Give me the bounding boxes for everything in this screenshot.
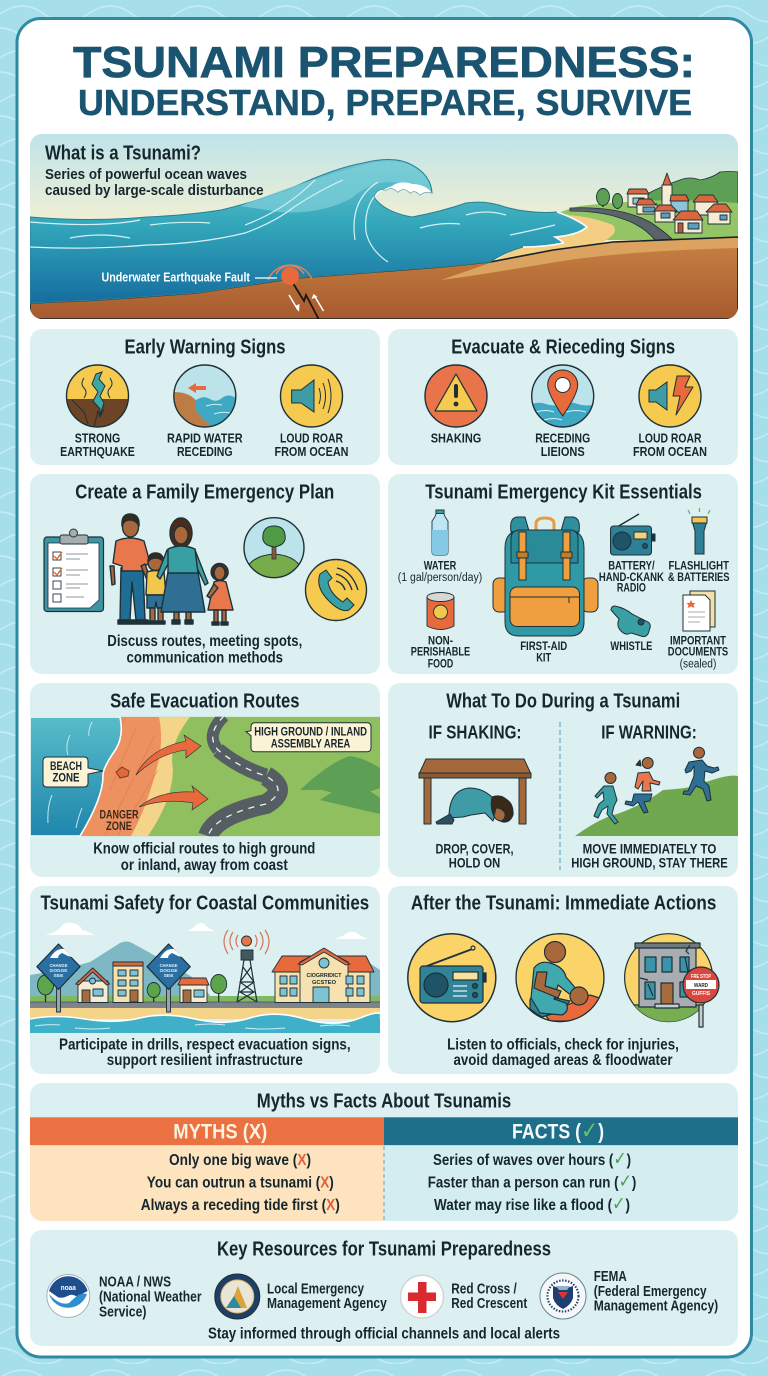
kit labels bbox=[398, 560, 730, 670]
mother bbox=[174, 612, 191, 621]
text: FEMA: FEMA bbox=[594, 1269, 627, 1285]
coastal scene: GOGGE bbox=[50, 968, 68, 973]
coastal scene bbox=[30, 923, 381, 1033]
panel: early warning signs: Early Warning Signs bbox=[124, 336, 286, 358]
panel: after the tsunami bbox=[388, 886, 738, 1074]
labels: LOUD ROAR bbox=[638, 432, 702, 446]
panel: coastal communities bbox=[30, 886, 381, 1074]
icon: receding location pin bbox=[530, 365, 596, 430]
family illustration bbox=[110, 514, 233, 625]
icon: important documents bbox=[683, 591, 715, 631]
logo: FEMA bbox=[540, 1273, 586, 1319]
panel: evacuate and receding signs bbox=[388, 329, 738, 465]
text: NOAA: NOAA / NWS bbox=[99, 1275, 171, 1291]
hero text: Series of powerful ocean waves bbox=[45, 166, 247, 183]
tower bbox=[237, 960, 257, 1002]
earth bbox=[30, 237, 738, 319]
boy bbox=[146, 570, 166, 595]
text: red cross: Red Crescent bbox=[451, 1296, 527, 1312]
labels: FROM OCEAN bbox=[633, 445, 707, 459]
text: FEMA: Management Agency) bbox=[594, 1299, 718, 1315]
text: red cross: Red Cross / bbox=[451, 1281, 517, 1297]
caption bbox=[447, 1036, 679, 1069]
kit labels: RADIO bbox=[617, 583, 646, 595]
kit labels: BATTERY/ bbox=[608, 560, 655, 572]
coastal scene: CHANGE bbox=[160, 963, 178, 968]
coastal scene: CIOGRRIDICT bbox=[306, 973, 342, 979]
house bbox=[78, 981, 108, 1002]
fault bbox=[292, 284, 320, 319]
icon: damaged building and stop sign bbox=[624, 934, 719, 1027]
logo: red cross bbox=[400, 1275, 444, 1318]
girl bbox=[208, 580, 233, 610]
labels bbox=[436, 840, 728, 871]
panel: coastal communities: Tsunami Safety for Coastal Communities bbox=[40, 892, 369, 914]
kit labels: FIRST-AID bbox=[520, 641, 567, 653]
stop sign text: GUFFIS bbox=[692, 991, 710, 997]
caption: communication methods bbox=[127, 649, 283, 666]
labels: EARTHQUAKE bbox=[60, 445, 135, 459]
text: NOAA bbox=[99, 1275, 202, 1321]
road bbox=[213, 716, 224, 750]
caption: support resilient infrastructure bbox=[107, 1052, 303, 1069]
caption: or inland, away from coast bbox=[121, 857, 288, 874]
logo: NOAA bbox=[47, 1274, 90, 1318]
sea bbox=[30, 159, 587, 303]
coastal scene: CHANGE bbox=[50, 963, 68, 968]
facts column: Faster than a person can run (✓) bbox=[428, 1171, 636, 1192]
panel: evacuate and receding signs: Evacuate & Rieceding Signs bbox=[451, 336, 675, 358]
road bbox=[570, 208, 672, 240]
kit labels: WHISTLE bbox=[610, 641, 653, 653]
beach zone callout bbox=[43, 757, 103, 787]
kit labels: (1 gal/person/day) bbox=[398, 572, 482, 584]
caption: Listen to officials, check for injuries, bbox=[447, 1036, 679, 1053]
footer note: Stay informed through official channels and local alerts bbox=[208, 1325, 560, 1342]
danger zone label: DANGER bbox=[100, 810, 139, 822]
kit labels: WATER bbox=[424, 560, 457, 572]
evacuation map bbox=[30, 716, 380, 836]
coastal scene: SEE bbox=[54, 973, 64, 978]
if shaking heading: IF SHAKING: bbox=[428, 722, 522, 742]
stop sign text bbox=[691, 974, 711, 997]
panel: safe evacuation routes bbox=[30, 683, 380, 877]
runner 1 bbox=[605, 772, 616, 784]
labels: LOUD ROAR bbox=[280, 432, 343, 446]
myths column: You can outrun a tsunami (X) bbox=[147, 1174, 334, 1191]
high ground callout: ASSEMBLY AREA bbox=[271, 738, 350, 750]
myths column: MYTHS (X) bbox=[173, 1120, 267, 1143]
panel: what to do during a tsunami bbox=[388, 683, 738, 877]
icon: first aid rescuer bbox=[516, 934, 610, 1022]
icon: flashlight bbox=[688, 508, 710, 554]
text: FEMA: (Federal Emergency bbox=[594, 1284, 707, 1300]
apartment bbox=[113, 964, 143, 1002]
caption: Participate in drills, respect evacuation signs, bbox=[59, 1036, 351, 1053]
panel: key resources: Key Resources for Tsunami Preparedness bbox=[217, 1239, 551, 1261]
kit labels: FOOD bbox=[428, 658, 453, 670]
panel: myths vs facts bbox=[30, 1083, 738, 1221]
coastal scene: SEE bbox=[164, 973, 174, 978]
caption: avoid damaged areas & floodwater bbox=[454, 1052, 672, 1069]
danger zone label bbox=[100, 810, 138, 830]
text: FEMA bbox=[594, 1269, 718, 1315]
kit labels: KIT bbox=[536, 653, 551, 665]
hero text bbox=[45, 142, 264, 285]
icon: checklist clipboard bbox=[44, 529, 104, 612]
runner 3 bbox=[694, 747, 704, 758]
icon: whistle bbox=[611, 606, 650, 637]
icon: shaking warning bbox=[425, 365, 487, 427]
kit labels: PERISHABLE bbox=[411, 647, 470, 659]
high ground callout bbox=[246, 723, 371, 752]
mountains bbox=[300, 756, 380, 792]
icon: battery radio bbox=[610, 514, 655, 555]
facts column bbox=[384, 1117, 738, 1221]
myths column bbox=[30, 1117, 384, 1221]
labels: LIEIONS bbox=[541, 445, 585, 459]
panel: family emergency plan: Create a Family Emergency Plan bbox=[75, 481, 334, 503]
logo: local emergency agency bbox=[215, 1274, 260, 1319]
hero text: caused by large-scale disturbance bbox=[45, 182, 264, 199]
labels: HIGH GROUND, STAY THERE bbox=[571, 855, 728, 871]
village bbox=[596, 173, 732, 233]
title: TSUNAMI PREPAREDNESS: bbox=[73, 38, 695, 87]
kit labels: HAND-CKANK bbox=[599, 572, 664, 584]
wave crest shading bbox=[240, 161, 431, 212]
panel: emergency kit essentials bbox=[388, 474, 738, 674]
high ground callout: HIGH GROUND / INLAND bbox=[254, 727, 367, 739]
panel: key resources bbox=[30, 1230, 738, 1346]
icon: canned food bbox=[427, 592, 454, 630]
labels: HOLD ON bbox=[449, 855, 500, 871]
labels: STRONG bbox=[75, 432, 120, 446]
signs bbox=[56, 985, 60, 1012]
kit labels: IMPORTANT bbox=[670, 635, 726, 647]
title: UNDERSTAND, PREPARE, SURVIVE bbox=[78, 82, 692, 123]
illustration: running uphill bbox=[575, 747, 738, 836]
logo: NOAA: noaa bbox=[61, 1285, 76, 1292]
panel: what to do during a tsunami: What To Do During a Tsunami bbox=[446, 690, 680, 712]
icon: loud roar from ocean bbox=[280, 365, 342, 427]
kit labels: NON- bbox=[428, 635, 453, 647]
arrows bbox=[136, 735, 201, 775]
labels: MOVE IMMEDIATELY TO bbox=[583, 840, 716, 856]
community center bbox=[275, 968, 370, 1002]
hero text: What is a Tsunami? bbox=[45, 142, 201, 164]
kit labels: DOCUMENTS bbox=[668, 647, 728, 659]
if warning heading: IF WARNING: bbox=[601, 722, 697, 742]
panel: after the tsunami: After the Tsunami: Immediate Actions bbox=[411, 892, 716, 914]
danger zone label: ZONE bbox=[106, 821, 132, 833]
labels: SHAKING bbox=[431, 432, 481, 446]
labels: RECEDING bbox=[177, 445, 233, 459]
text: red cross bbox=[451, 1281, 527, 1312]
icon: phone bbox=[306, 560, 366, 620]
title bbox=[73, 38, 695, 123]
beach zone callout: BEACH bbox=[50, 761, 82, 773]
caption: Know official routes to high ground bbox=[93, 840, 315, 857]
labels: DROP, COVER, bbox=[436, 840, 514, 856]
sand bbox=[493, 215, 615, 262]
icon: loud roar with lightning bbox=[639, 365, 701, 427]
coastal scene: GOGGE bbox=[160, 968, 178, 973]
text: local agency bbox=[267, 1281, 387, 1312]
coastal scene: GCSTEO bbox=[312, 980, 337, 986]
stop sign text: WARD bbox=[694, 983, 708, 989]
illustration: person under table bbox=[419, 759, 531, 824]
caption bbox=[107, 633, 302, 666]
hero text: Underwater Earthquake Fault bbox=[102, 271, 251, 285]
kit labels: FLASHLIGHT bbox=[668, 560, 729, 572]
panel: safe evacuation routes: Safe Evacuation Routes bbox=[110, 690, 300, 712]
text: NOAA: (National Weather bbox=[99, 1290, 202, 1306]
labels bbox=[431, 432, 707, 459]
panel: what is a tsunami bbox=[30, 134, 738, 319]
text: local agency: Local Emergency bbox=[267, 1281, 364, 1297]
icon: rapid water receding bbox=[173, 364, 236, 428]
back hill bbox=[648, 171, 738, 203]
panel: myths vs facts: Myths vs Facts About Tsunamis bbox=[257, 1090, 511, 1112]
icon: meeting spot tree bbox=[244, 517, 304, 578]
runner 2 bbox=[642, 758, 653, 768]
panel: emergency kit essentials: Tsunami Emergency Kit Essentials bbox=[425, 481, 702, 503]
grass bbox=[560, 200, 738, 240]
myths column: Always a receding tide first (X) bbox=[141, 1197, 340, 1214]
panel: early warning signs bbox=[30, 329, 380, 465]
labels: RECEDING bbox=[535, 432, 590, 446]
facts column: Series of waves over hours (✓) bbox=[433, 1149, 631, 1170]
icon: radio bbox=[408, 934, 496, 1022]
stop sign text: FRE STOP bbox=[691, 974, 711, 980]
text: NOAA: Service) bbox=[99, 1305, 147, 1321]
labels bbox=[60, 432, 348, 459]
caption bbox=[59, 1036, 351, 1069]
beach zone callout: ZONE bbox=[52, 773, 80, 785]
text: local agency: Management Agency bbox=[267, 1296, 387, 1312]
kit labels: & BATTERIES bbox=[668, 572, 730, 584]
icon: backpack bbox=[493, 517, 598, 636]
panel: family emergency plan bbox=[30, 474, 380, 674]
caption bbox=[93, 840, 315, 874]
trees bbox=[46, 984, 219, 1002]
myths column: Only one big wave (X) bbox=[169, 1152, 311, 1169]
labels: FROM OCEAN bbox=[274, 445, 348, 459]
caption: Discuss routes, meeting spots, bbox=[107, 633, 302, 650]
labels: RAPID WATER bbox=[167, 432, 243, 446]
small house bbox=[180, 985, 207, 1002]
facts column: FACTS (✓) bbox=[512, 1117, 604, 1144]
father bbox=[120, 568, 145, 620]
facts column: Water may rise like a flood (✓) bbox=[434, 1194, 630, 1215]
kit labels: (sealed) bbox=[680, 658, 716, 670]
icon: water bottle bbox=[432, 510, 448, 555]
earthquake focus bbox=[268, 265, 312, 280]
icon: strong earthquake bbox=[66, 365, 129, 429]
